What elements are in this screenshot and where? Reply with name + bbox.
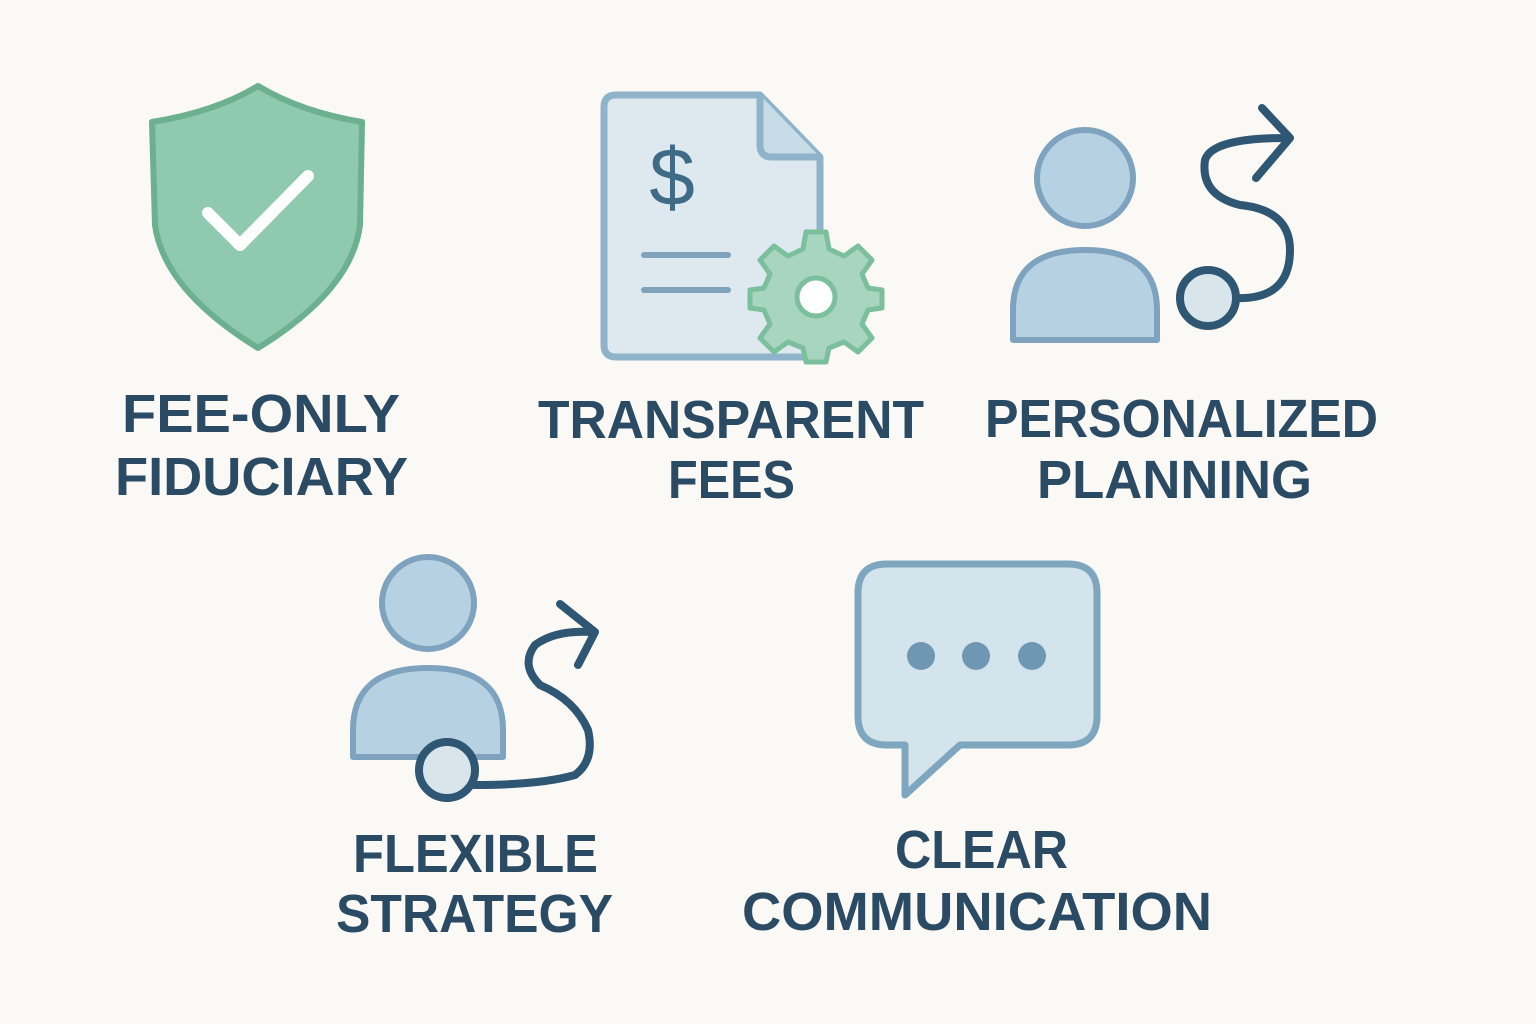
label: transparent fees: TRANSPARENT [538,390,924,450]
label: personalized planning [985,389,1378,510]
icon: fee document with gear [604,95,882,362]
label: flexible strategy [336,824,613,944]
icon: person with flexible path arrow [353,557,595,798]
label: personalized planning: PERSONALIZED [985,389,1378,449]
label: flexible strategy: STRATEGY [336,884,613,944]
label: clear communication: COMMUNICATION [742,882,1212,942]
icon: speech bubble [858,564,1097,795]
label: clear communication: CLEAR [895,820,1068,880]
label: clear communication [742,820,1212,942]
icon: fee document with gear: $ [649,132,695,223]
label: flexible strategy: FLEXIBLE [353,824,598,884]
label: fee-only fiduciary [115,384,408,507]
label: transparent fees: FEES [668,450,795,510]
label: fee-only fiduciary: FIDUCIARY [115,447,408,507]
icon: person with path arrow (personalized planning) [1013,108,1290,340]
label: transparent fees [538,390,924,510]
label: fee-only fiduciary: FEE-ONLY [122,384,400,444]
label: personalized planning: PLANNING [1037,450,1312,510]
icon: shield with check [152,86,362,348]
